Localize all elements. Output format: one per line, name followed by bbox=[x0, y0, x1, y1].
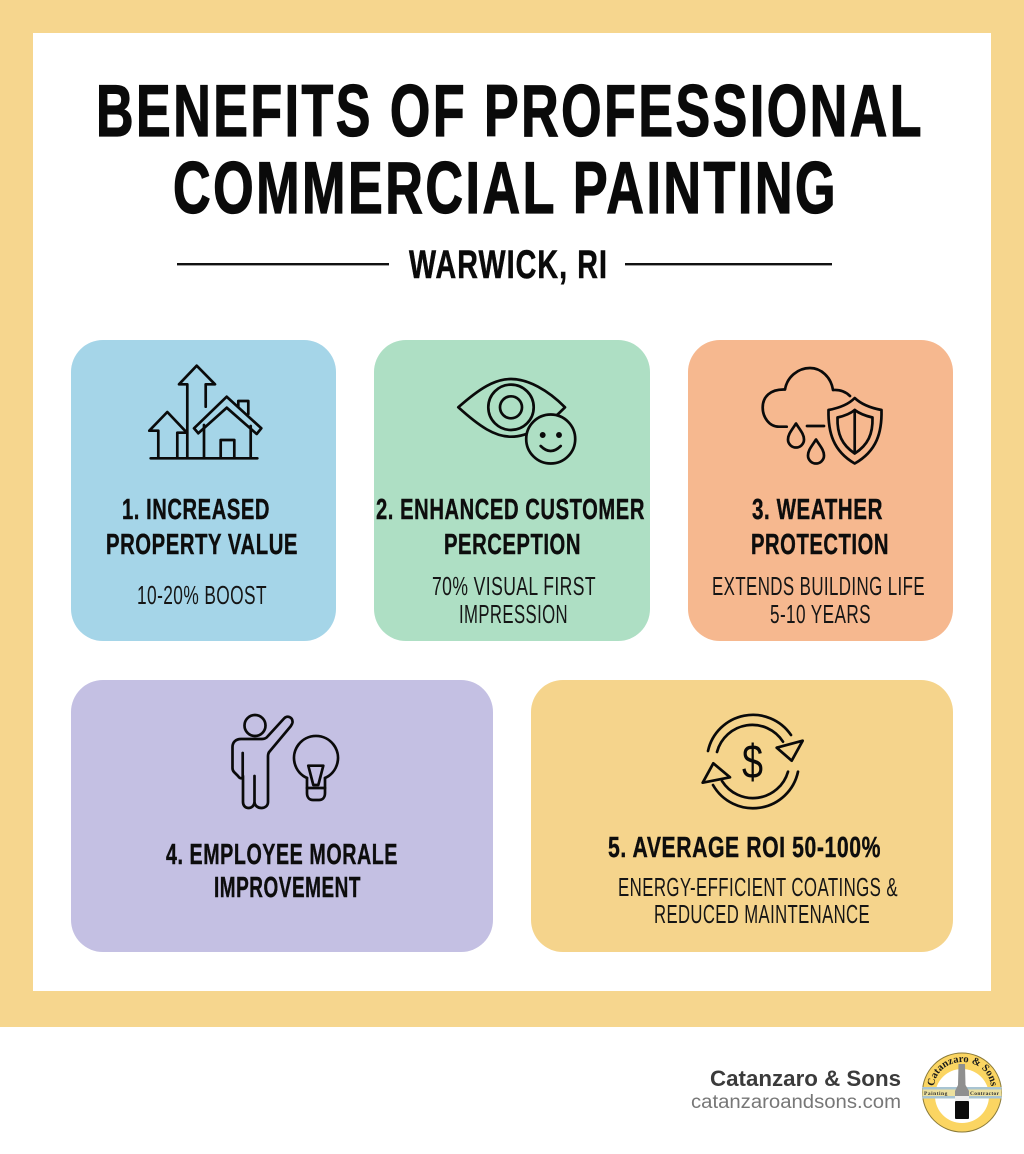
logo: Catanzaro & Sons paint brush badge bbox=[922, 1052, 1002, 1132]
icon: dollar with circular arrows bbox=[703, 715, 803, 808]
heading: PROPERTY VALUE bbox=[106, 529, 298, 561]
heading: 5. AVERAGE ROI 50-100% bbox=[608, 832, 881, 864]
logo: Catanzaro & Sons paint brush badge: Contractor bbox=[970, 1091, 1000, 1097]
logo: Catanzaro & Sons paint brush badge: Painting bbox=[924, 1091, 948, 1097]
stat text: 5-10 YEARS bbox=[770, 601, 871, 629]
stat text: 70% VISUAL FIRST bbox=[432, 573, 596, 601]
heading: IMPROVEMENT bbox=[214, 872, 361, 904]
title bbox=[96, 71, 924, 229]
heading bbox=[751, 494, 889, 561]
panel: weather protection bbox=[688, 340, 953, 641]
heading: 1. INCREASED bbox=[122, 494, 270, 526]
heading bbox=[166, 839, 398, 904]
icon: person and light bulb bbox=[232, 715, 338, 808]
white content panel bbox=[33, 33, 991, 991]
subtitle: location: WARWICK, RI bbox=[409, 243, 608, 287]
heading: 4. EMPLOYEE MORALE bbox=[166, 839, 398, 871]
footer brand name and URL: Catanzaro & Sons bbox=[710, 1066, 901, 1091]
stat text: 10-20% BOOST bbox=[137, 582, 267, 610]
panel: average ROI bbox=[531, 680, 953, 952]
panel: increased property value bbox=[71, 340, 336, 641]
stat text bbox=[712, 573, 925, 629]
stat text bbox=[618, 874, 898, 929]
heading bbox=[106, 494, 298, 561]
footer brand name and URL: catanzaroandsons.com bbox=[691, 1092, 901, 1113]
footer brand name and URL bbox=[691, 1066, 901, 1113]
logo: Catanzaro & Sons paint brush badge: Catanzaro & Sons bbox=[928, 1057, 996, 1086]
stat text: IMPRESSION bbox=[459, 601, 568, 629]
stat text: EXTENDS BUILDING LIFE bbox=[712, 573, 925, 601]
heading: 2. ENHANCED CUSTOMER bbox=[376, 494, 645, 526]
heading: 3. WEATHER bbox=[752, 494, 883, 526]
panel: enhanced customer perception bbox=[374, 340, 650, 641]
panel: employee morale bbox=[71, 680, 493, 952]
heading: PERCEPTION bbox=[444, 529, 581, 561]
icon: house with rising arrows bbox=[149, 366, 261, 458]
heading: PROTECTION bbox=[751, 529, 889, 561]
icon: eye and smiley bbox=[458, 379, 575, 464]
stat text: REDUCED MAINTENANCE bbox=[654, 901, 870, 929]
icon: cloud, rain and shield bbox=[763, 368, 882, 464]
heading bbox=[376, 494, 645, 561]
icon: dollar with circular arrows: $ bbox=[742, 736, 763, 789]
stat text bbox=[432, 573, 596, 629]
